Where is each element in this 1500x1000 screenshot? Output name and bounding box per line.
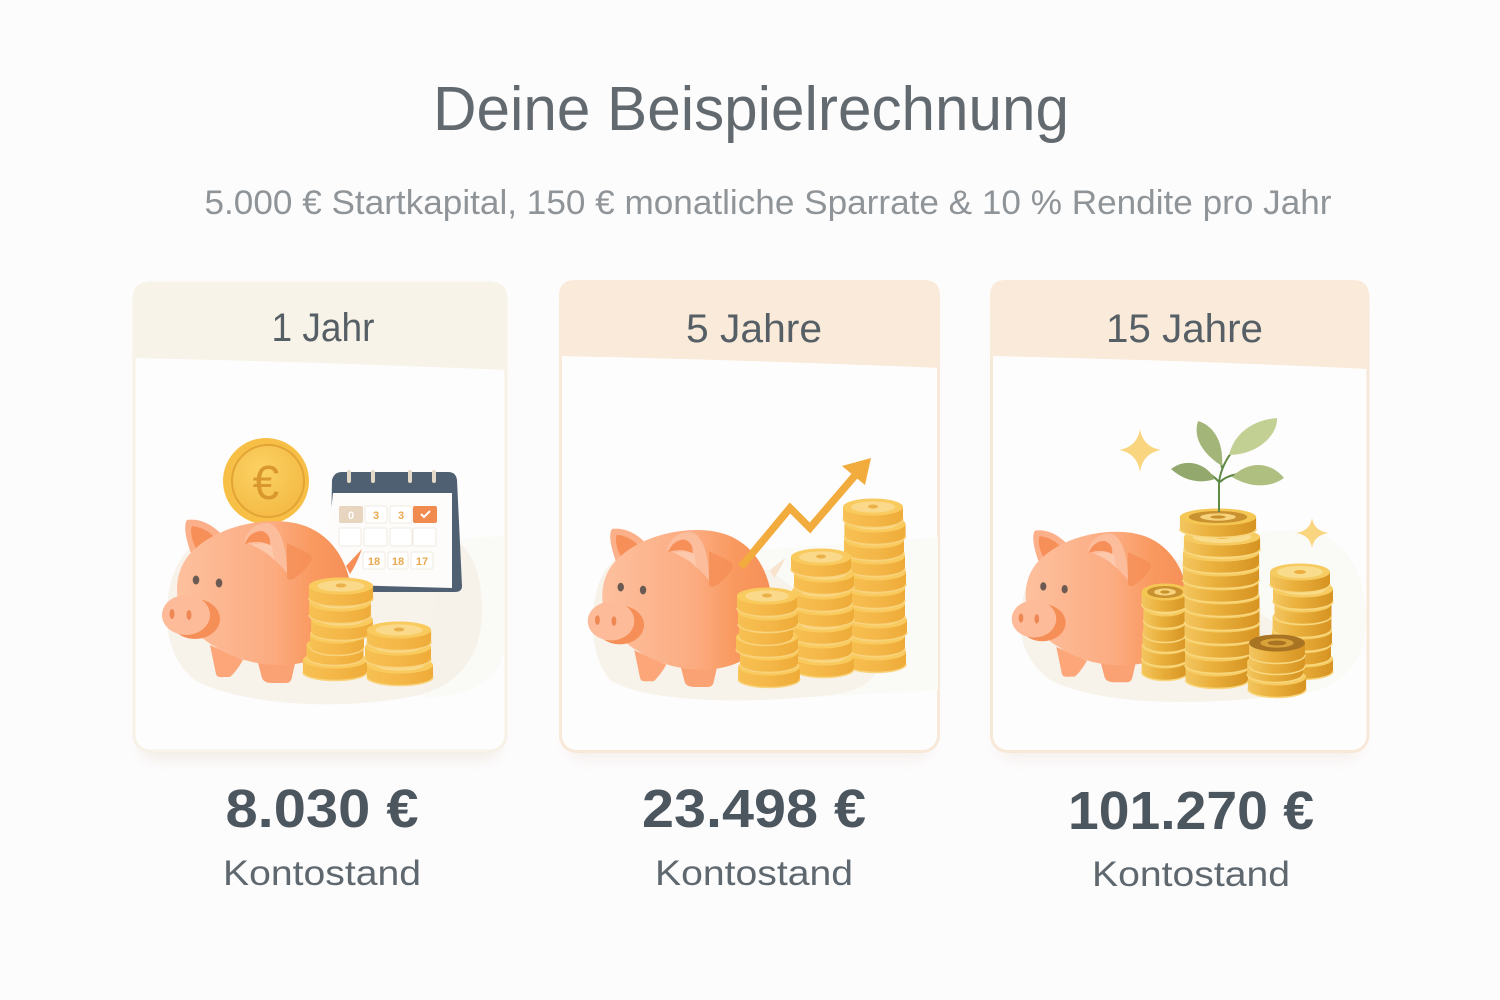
panel: 15 Jahre (990, 280, 1369, 894)
icon: coin stack right (1270, 564, 1333, 680)
icon: piggy bank (162, 520, 352, 683)
label: 15 Jahre: 15 Jahre (1106, 307, 1263, 351)
illustration: faint backdrop (760, 537, 938, 700)
icon: coin stack center (1180, 508, 1260, 688)
icon: coin stack right (843, 498, 907, 672)
caption: Kontostand: Kontostand (1092, 855, 1290, 894)
icon: euro coin: € (253, 457, 280, 510)
icon: coin stack left (736, 588, 800, 688)
panel: 5 Jahre (559, 280, 940, 893)
icon: euro coin (223, 438, 309, 524)
icon: sparkle large (1119, 429, 1161, 472)
title: Deine Beispielrechnung (433, 75, 1069, 144)
icon: coin stack right (365, 622, 433, 686)
caption: Kontostand: Kontostand (223, 854, 421, 893)
label: 5 Jahre: 5 Jahre (686, 307, 822, 351)
caption: Kontostand: Kontostand (655, 854, 853, 893)
label: 1 Jahr: 1 Jahr (272, 306, 374, 350)
value: 101.270 €: 101.270 € (1068, 781, 1314, 841)
icon: calendar: 18 (368, 556, 380, 568)
icon: coin stack middle (791, 548, 854, 678)
icon: pig tail (346, 549, 362, 574)
illustration: faint backdrop (1180, 530, 1366, 700)
illustration: backdrop blob (1020, 555, 1312, 702)
icon: piggy bank (1012, 530, 1189, 682)
icon: piggy bank (588, 529, 772, 687)
icon: coin stack left (1142, 584, 1189, 680)
panel: 1 Jahr (133, 282, 507, 893)
icon: calendar: 17 (416, 556, 428, 568)
arrow: growth (741, 458, 871, 567)
icon: sparkle small (1296, 518, 1329, 548)
icon: calendar: 18 (392, 556, 404, 568)
header: 15 Jahre (990, 280, 1369, 369)
icon: calendar: 0 (348, 510, 354, 522)
header: 5 Jahre (559, 280, 940, 368)
illustration: backdrop blob (593, 555, 877, 700)
value: 23.498 €: 23.498 € (642, 779, 866, 839)
illustration: faint backdrop (425, 536, 504, 698)
value: 8.030 €: 8.030 € (226, 779, 418, 839)
icon: coin stack front (1247, 634, 1306, 698)
icon: calendar: 3 (373, 510, 379, 522)
subtitle: 5.000 € Startkapital, 150 € monatliche Sparrate & 10 % Rendite pro Jahr (204, 184, 1331, 222)
icon: plant (1171, 418, 1284, 512)
icon: calendar: 3 (398, 510, 404, 522)
icon: pig tail (770, 558, 785, 578)
icon: coin stack left (303, 578, 373, 680)
icon: calendar (328, 470, 462, 592)
illustration: backdrop blob (167, 538, 482, 704)
header: 1 Jahr (133, 282, 507, 370)
